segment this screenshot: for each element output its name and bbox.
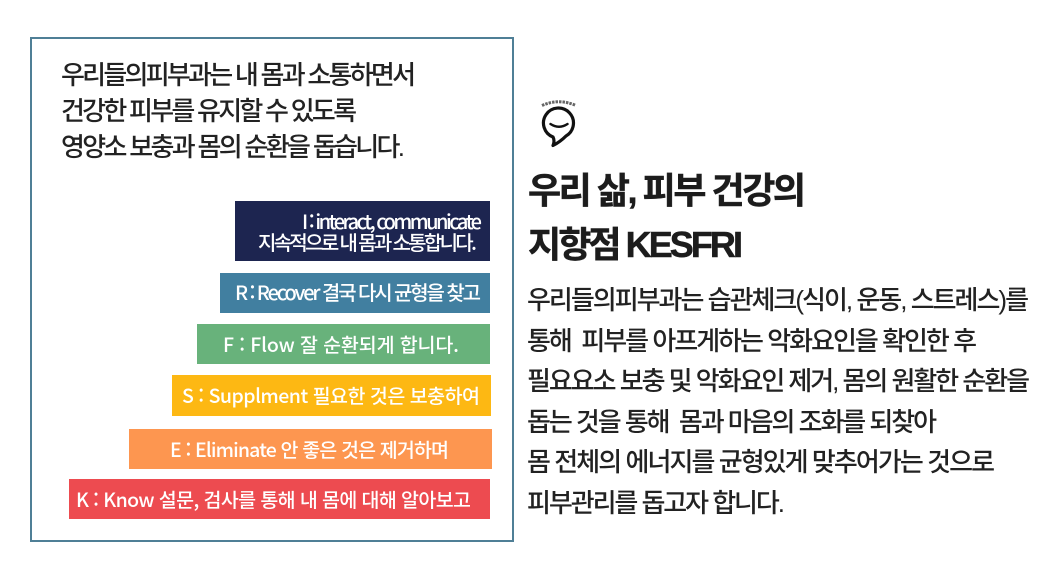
step R: recover	[220, 273, 490, 313]
heading	[528, 170, 806, 265]
panel intro text: 우리들의피부과는 내 몸과 소통하면서	[61, 60, 416, 90]
step R: recover: R : Recover 결국 다시 균형을 찾고	[235, 277, 481, 306]
step F: flow	[197, 324, 490, 364]
step F: flow: F : Flow 잘 순환되게 합니다.	[223, 329, 459, 358]
body text: 돕는 것을 통해 몸과 마음의 조화를 되찾아	[527, 407, 937, 437]
panel intro text: 영양소 보충과 몸의 순환을 돕습니다.	[61, 132, 405, 162]
step I: interact: 지속적으로 내 몸과 소통합니다.	[258, 227, 477, 256]
panel intro text	[61, 60, 416, 162]
step I: interact: I : interact, communicate	[302, 206, 482, 235]
heading: 지향점 KESFRI	[528, 224, 743, 265]
body text: 피부관리를 돕고자 합니다.	[527, 488, 785, 518]
step S: supplement	[172, 375, 491, 416]
body text: 우리들의피부과는 습관체크(식이, 운동, 스트레스)를	[527, 285, 1029, 315]
body text: 통해 피부를 아프게하는 악화요인을 확인한 후	[527, 326, 977, 356]
body text	[527, 285, 1030, 518]
step K: know	[69, 479, 490, 519]
step I: interact	[235, 201, 490, 261]
step K: know: K : Know 설문, 검사를 통해 내 몸에 대해 알아보고	[76, 484, 471, 513]
step S: supplement: S : Supplment 필요한 것은 보충하여	[182, 380, 480, 409]
body text: 필요요소 보충 및 악화요인 제거, 몸의 원활한 순환을	[527, 366, 1030, 396]
panel: KESFRI steps	[31, 38, 513, 541]
body text: 몸 전체의 에너지를 균형있게 맞추어가는 것으로	[527, 447, 995, 477]
icon: smiling speech bubble logo	[542, 102, 576, 146]
panel intro text: 건강한 피부를 유지할 수 있도록	[61, 96, 357, 126]
step E: eliminate	[129, 429, 492, 469]
step E: eliminate: E : Eliminate 안 좋은 것은 제거하며	[170, 434, 449, 463]
heading: 우리 삶, 피부 건강의	[528, 170, 806, 211]
